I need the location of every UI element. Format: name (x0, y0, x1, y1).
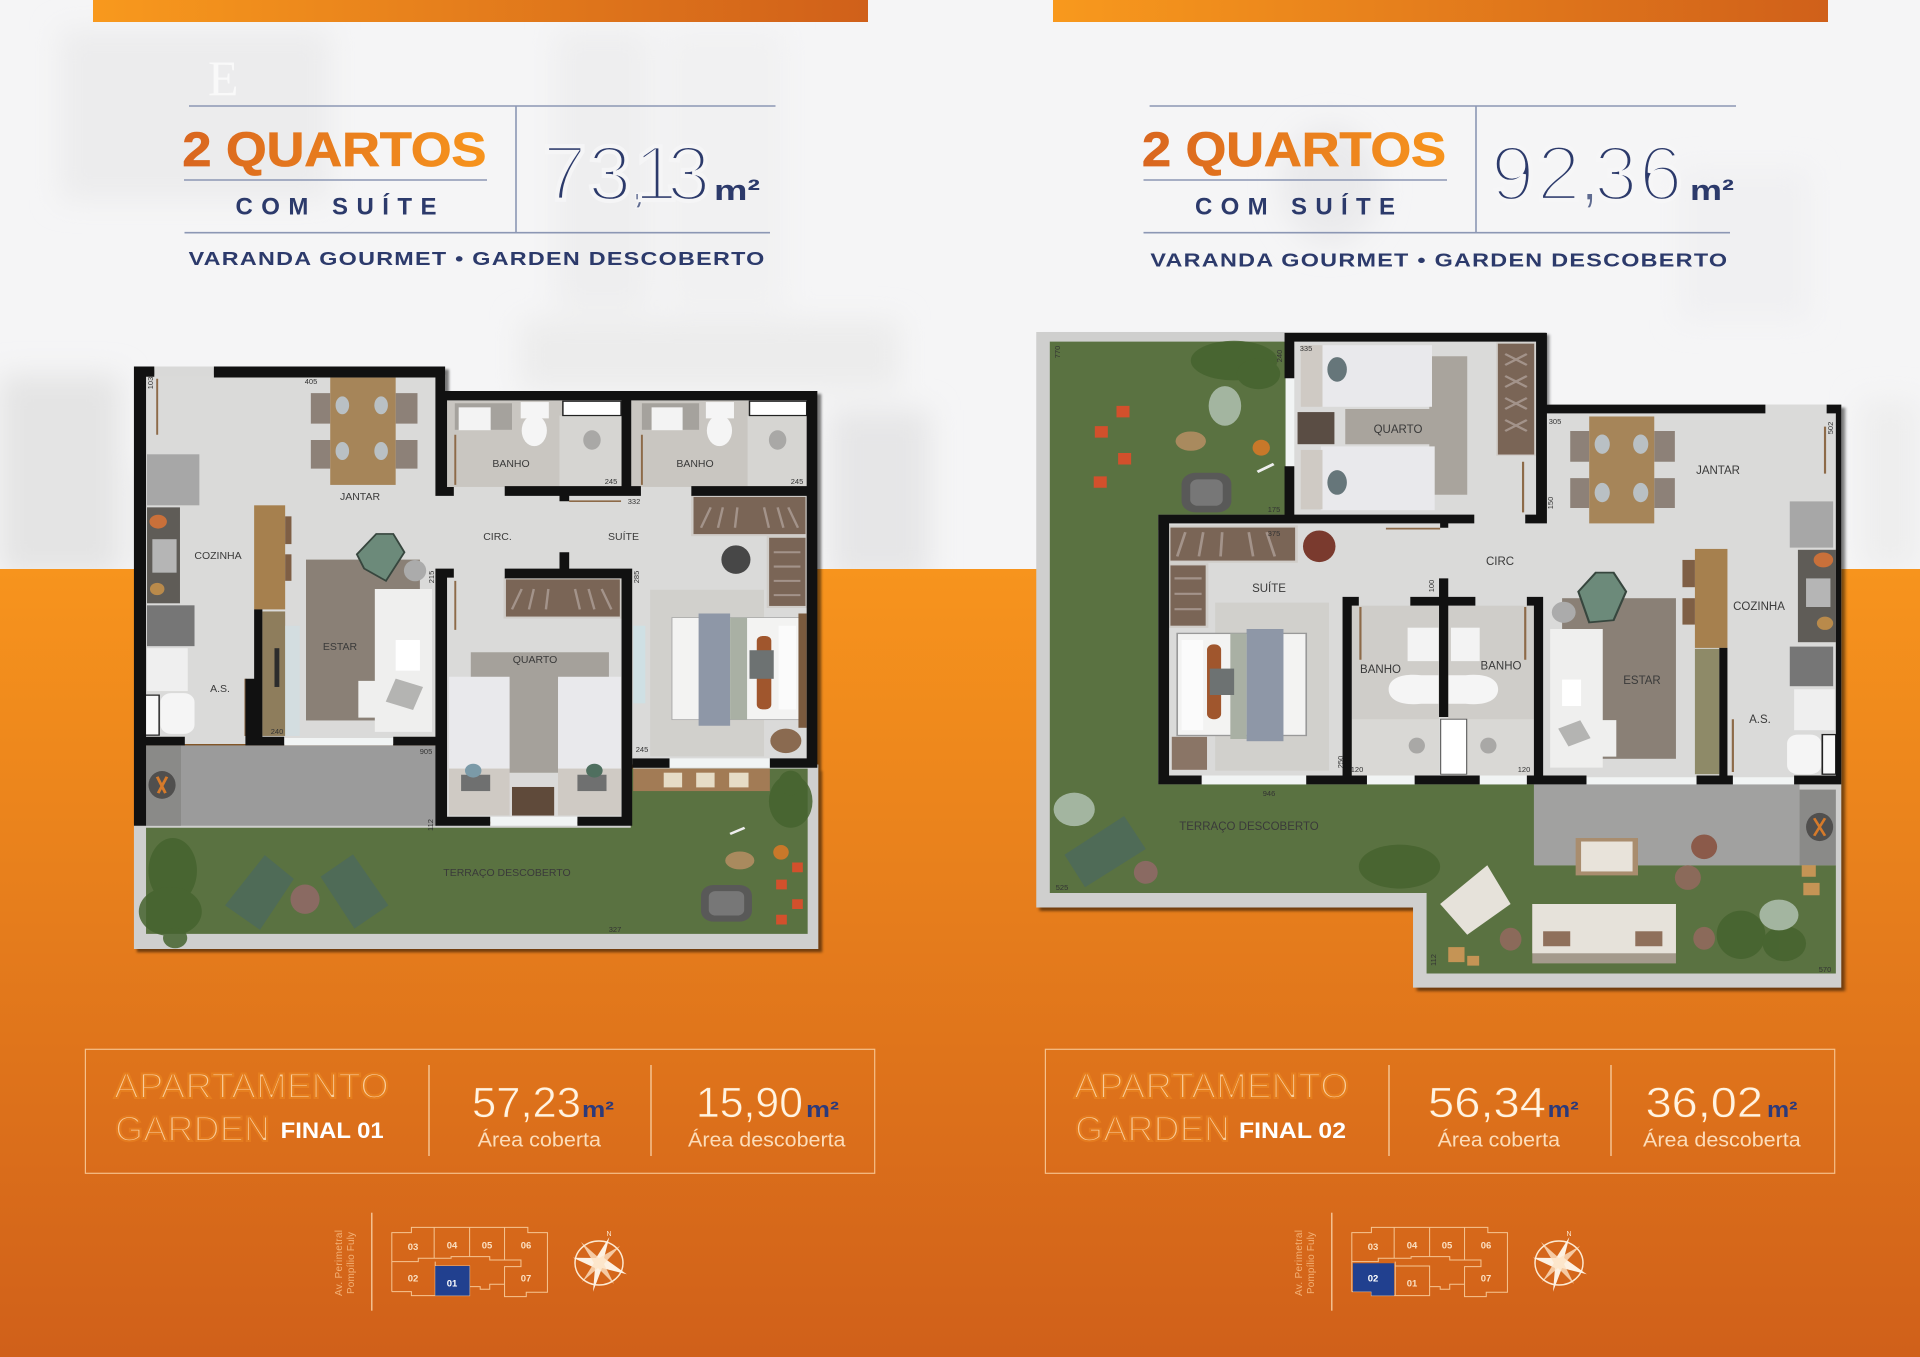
room labels: 327 (609, 925, 621, 934)
pet items (701, 885, 752, 922)
street name: Av. Perimetral (1294, 1230, 1305, 1296)
header right: 2 quartos 92,36 m² (1142, 106, 1736, 270)
ghost letter in background photo: E (208, 50, 239, 106)
unit numbers: 05 (482, 1240, 493, 1252)
loungers (225, 855, 294, 930)
room labels: 120 (1518, 765, 1530, 774)
unit numbers: 07 (1481, 1274, 1491, 1284)
suite wardrobes (1169, 526, 1296, 627)
street name (334, 1230, 357, 1296)
room labels: 245 (636, 745, 648, 754)
dining table (311, 393, 417, 469)
firepit (1806, 813, 1833, 841)
highlighted unit 02 (1353, 1263, 1394, 1296)
bar and stools (1695, 549, 1727, 648)
room labels: SUÍTE (608, 530, 639, 543)
subheading: com suíte: COM SUÍTE (236, 192, 436, 220)
room labels: JANTAR (340, 491, 380, 503)
living rug (1562, 598, 1676, 759)
walls (1158, 333, 1841, 784)
room labels (146, 377, 803, 934)
wardrobes (505, 496, 807, 618)
covered area value: 56,34 (1428, 1079, 1546, 1127)
room labels: QUARTO (513, 654, 557, 666)
room labels: BANHO (1481, 660, 1521, 672)
floor plan: final 02 (1036, 332, 1845, 991)
building key plan (392, 1227, 547, 1297)
compass (1533, 1231, 1587, 1292)
grass (146, 769, 808, 934)
room labels: ESTAR (323, 641, 358, 653)
room labels: 103 (146, 377, 155, 389)
room labels: 120 (1351, 765, 1363, 774)
unit numbers: 06 (521, 1240, 531, 1252)
area total 73,13: 73,13 (543, 129, 710, 217)
pet items (1182, 473, 1231, 512)
unit numbers: 03 (1368, 1242, 1378, 1253)
room labels: COZINHA (1733, 601, 1785, 613)
unit numbers: 06 (1481, 1240, 1491, 1252)
unit numbers: 02 (1368, 1274, 1378, 1284)
room labels: 525 (1056, 883, 1068, 892)
room labels: 502 (1826, 422, 1835, 434)
suite rug and bed (650, 590, 764, 756)
room labels: SUÍTE (1252, 582, 1286, 595)
room labels: 215 (427, 571, 436, 583)
top orange bar left (93, 0, 868, 22)
deck (633, 769, 770, 791)
tv console (262, 611, 285, 736)
room labels: 250 (1336, 756, 1345, 768)
room labels: A.S. (210, 683, 230, 695)
info box: final 01: m² (806, 1097, 839, 1122)
living rug (306, 560, 420, 720)
unit numbers: 01 (1407, 1278, 1418, 1290)
room labels (1053, 344, 1835, 974)
unit numbers (408, 1240, 531, 1290)
heading: 2 quartos: 2 QUARTOS (182, 124, 486, 177)
door strips (1360, 427, 1825, 772)
room labels: 240 (1275, 350, 1284, 362)
unit numbers (1368, 1240, 1491, 1290)
room labels: 285 (632, 571, 641, 583)
top orange bar right (1053, 0, 1828, 22)
room labels: 150 (1546, 497, 1555, 509)
street name: Pompílio Fuly (346, 1232, 357, 1294)
room labels: BANHO (676, 458, 714, 470)
street name: Av. Perimetral (334, 1230, 345, 1296)
info box: final 02: m² (1548, 1097, 1579, 1122)
unit numbers: 05 (1442, 1240, 1453, 1252)
room labels: COZINHA (194, 550, 242, 562)
room labels: BANHO (492, 458, 530, 470)
room labels: 770 (1053, 346, 1062, 358)
street name (1294, 1230, 1317, 1296)
header left: 2 quartos 73,13 m² (182, 106, 775, 269)
room labels: 245 (605, 477, 617, 486)
room labels: 112 (426, 819, 435, 831)
plants (1191, 341, 1806, 961)
room labels: 405 (305, 377, 317, 386)
unit numbers: 04 (447, 1240, 458, 1252)
interior floor (144, 375, 813, 822)
unit numbers: 03 (408, 1242, 418, 1253)
sofa (358, 589, 432, 732)
outdoor furniture (1576, 838, 1638, 875)
unit numbers: 04 (1407, 1240, 1418, 1252)
bar and stools (254, 505, 285, 609)
final 02: FINAL 02 (1239, 1118, 1346, 1143)
covered area label: Área coberta (1438, 1129, 1561, 1152)
room labels: TERRAÇO DESCOBERTO (1179, 821, 1319, 833)
final 01: FINAL 01 (281, 1118, 384, 1143)
suite rug and bed (1215, 603, 1329, 771)
compass (573, 1231, 627, 1292)
paved veranda (146, 745, 437, 826)
room labels: 112 (1429, 954, 1438, 966)
locator: final 02 (1294, 1213, 1587, 1311)
sofa (1550, 629, 1616, 768)
interior floor (1158, 334, 1839, 784)
unit numbers: 07 (521, 1274, 531, 1284)
terrace border (1036, 332, 1841, 988)
room labels: 332 (628, 497, 640, 506)
room labels: 175 (1268, 505, 1280, 514)
info box: final 02: GARDEN (1075, 1110, 1230, 1149)
info box: final 01: m² (582, 1097, 614, 1122)
terrace border (134, 765, 818, 949)
walls (134, 367, 817, 826)
firepit (148, 771, 176, 799)
armchair (1578, 573, 1626, 622)
room labels: 240 (271, 727, 283, 736)
room labels: A.S. (1749, 714, 1771, 726)
uncovered area value: 36,02 (1646, 1079, 1763, 1127)
paved veranda (1534, 784, 1800, 865)
unit numbers: 02 (408, 1274, 418, 1284)
covered area label: Área coberta (478, 1129, 602, 1152)
quarto furniture (471, 652, 609, 773)
room labels: 905 (420, 747, 432, 756)
building key plan (1352, 1227, 1507, 1297)
room labels: CIRC (1486, 556, 1514, 568)
grass (1050, 342, 1836, 974)
features line: VARANDA GOURMET • GARDEN DESCOBERTO (1150, 250, 1728, 270)
plants (139, 771, 813, 948)
room labels: 570 (1819, 965, 1831, 974)
uncovered area value: 15,90 (696, 1079, 803, 1127)
room labels: ESTAR (1623, 675, 1661, 687)
room labels: 335 (1300, 344, 1312, 353)
door and window strips (157, 379, 642, 736)
kitchen (147, 454, 199, 505)
room labels: QUARTO (1374, 424, 1422, 436)
uncovered area label: Área descoberta (1643, 1129, 1802, 1152)
kitchen (1790, 501, 1833, 548)
room labels: 946 (1263, 789, 1275, 798)
room labels: BANHO (1360, 664, 1401, 676)
quarto furniture (1497, 343, 1535, 455)
room labels: 375 (1268, 529, 1280, 538)
compass: N (1566, 1231, 1572, 1238)
info box: final 01: GARDEN (115, 1110, 270, 1149)
dining table (1570, 431, 1675, 508)
room labels: CIRC. (483, 531, 512, 543)
armchair (357, 534, 404, 581)
room labels: 245 (791, 477, 803, 486)
subheading: com suíte: COM SUÍTE (1195, 192, 1395, 220)
info box: final 01 (85, 1049, 875, 1173)
room labels: JANTAR (1696, 465, 1740, 477)
bathrooms (447, 400, 622, 487)
bathrooms (1352, 606, 1439, 776)
windows (1202, 378, 1794, 784)
info box: final 02 (1045, 1049, 1835, 1173)
highlighted unit 01 (435, 1266, 470, 1296)
unit numbers: 01 (447, 1278, 458, 1290)
windows (284, 738, 770, 826)
lounger and table (1064, 816, 1146, 887)
street name: Pompílio Fuly (1306, 1232, 1317, 1294)
floor plan: final 01 (134, 367, 822, 952)
heading: 2 quartos: 2 QUARTOS (1142, 124, 1446, 177)
room labels: 305 (1549, 417, 1561, 426)
unit m²: m² (1690, 175, 1734, 207)
uncovered area label: Área descoberta (688, 1129, 846, 1152)
compass: N (606, 1231, 612, 1238)
info box: final 02: m² (1767, 1097, 1798, 1122)
apartamento garden title: APARTAMENTO (114, 1067, 389, 1106)
room labels: TERRAÇO DESCOBERTO (443, 867, 571, 879)
room labels: 100 (1427, 580, 1436, 592)
apartamento garden title: APARTAMENTO (1074, 1067, 1349, 1106)
unit m²: m² (714, 175, 760, 207)
locator: final 01 (334, 1213, 627, 1311)
area total 92,36: 92,36 (1491, 129, 1682, 217)
covered area value: 57,23 (472, 1079, 581, 1127)
features line: VARANDA GOURMET • GARDEN DESCOBERTO (189, 248, 766, 269)
